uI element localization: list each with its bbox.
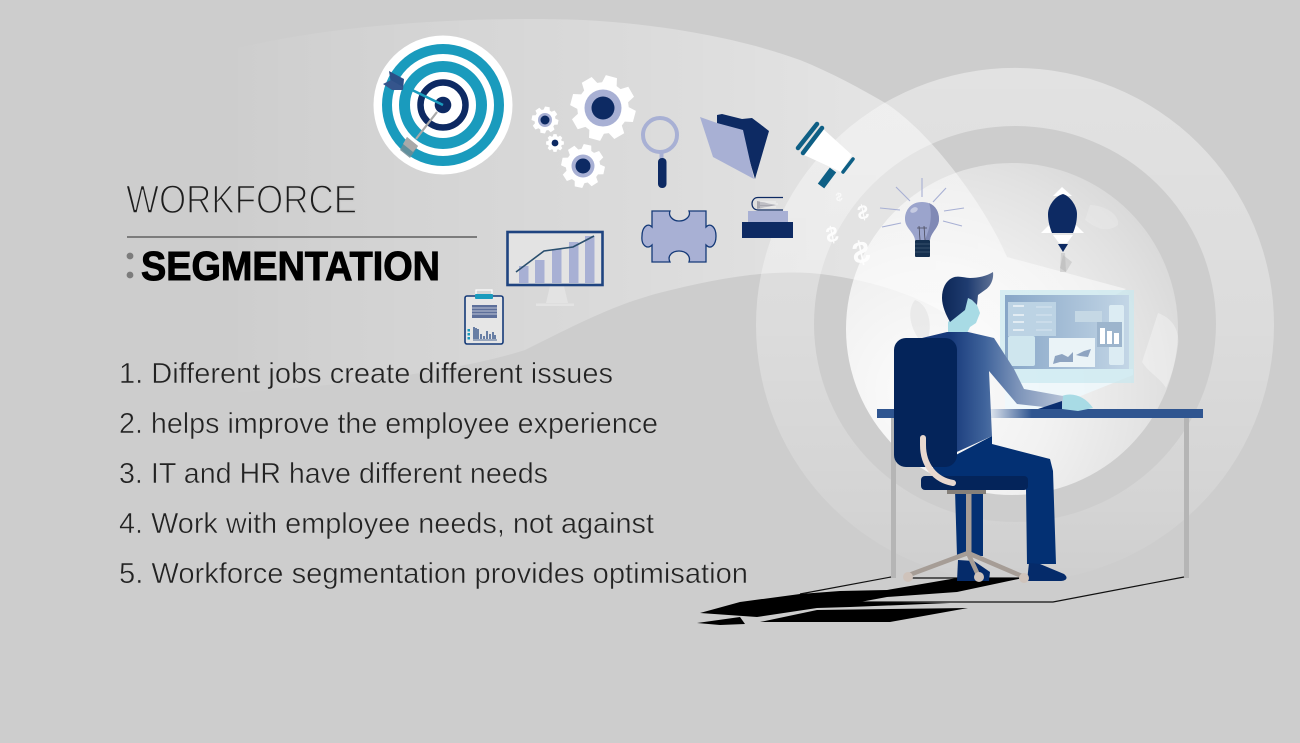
list item 3: 3. IT and HR have different needs [119, 458, 548, 490]
floor outline [800, 577, 1184, 602]
icon: dollar signs: $ [834, 189, 844, 205]
icon: folder [700, 114, 769, 179]
medium gear [557, 140, 609, 192]
face and neck [948, 298, 980, 333]
hair [942, 272, 993, 322]
icon: puzzle piece [642, 211, 716, 262]
person at desk [877, 272, 1203, 583]
colon mark [127, 253, 133, 278]
icon: stack of books [742, 198, 793, 238]
desk legs [891, 418, 1189, 578]
icon: megaphone [798, 124, 853, 186]
tiny gear [546, 134, 564, 152]
icon: gears [530, 68, 643, 192]
screen projection [1005, 369, 1133, 416]
far shoe [957, 560, 990, 581]
computer screen [1000, 290, 1134, 383]
faint world map [910, 205, 1178, 388]
title divider [127, 236, 477, 238]
near leg [933, 436, 1056, 564]
list item 4: 4. Work with employee needs, not against [119, 508, 654, 540]
list item 5: 5. Workforce segmentation provides optimisation [119, 558, 748, 590]
list item 2: 2. helps improve the employee experience [119, 408, 658, 440]
small gear [530, 105, 560, 135]
icon: light bulb [880, 178, 964, 257]
numbered list [119, 358, 748, 590]
desk and floor [697, 418, 1189, 625]
heading: segmentation: SEGMENTATION [141, 243, 440, 289]
chair armrest [923, 438, 953, 483]
chair back [894, 338, 957, 467]
icon: clipboard report [465, 290, 503, 344]
desk top [877, 409, 1203, 418]
heading: workforce: WORKFORCE [126, 178, 357, 222]
torso and arm [922, 332, 1063, 466]
icon: rocket [1041, 187, 1084, 272]
far leg [955, 490, 983, 556]
icon: dollar signs: $ [849, 234, 873, 271]
chair seat [921, 476, 1028, 490]
icon: target with arrow [374, 36, 512, 174]
chair base [903, 490, 1029, 583]
large gear [563, 68, 643, 148]
cast shadow [697, 578, 1023, 625]
icon: dollar signs [824, 189, 873, 271]
icon: bar chart monitor [508, 232, 602, 306]
list item 1: 1. Different jobs create different issues [119, 358, 613, 390]
arm shadow on desk [1038, 401, 1062, 409]
hand [1062, 394, 1093, 411]
icon: dollar signs: $ [824, 221, 841, 248]
near shoe [1027, 563, 1067, 581]
icon: dollar signs: $ [855, 201, 871, 225]
background swoosh [238, 19, 1126, 392]
concentric glow circles [756, 68, 1274, 582]
icon: magnifying glass [643, 118, 677, 188]
title [126, 178, 477, 289]
